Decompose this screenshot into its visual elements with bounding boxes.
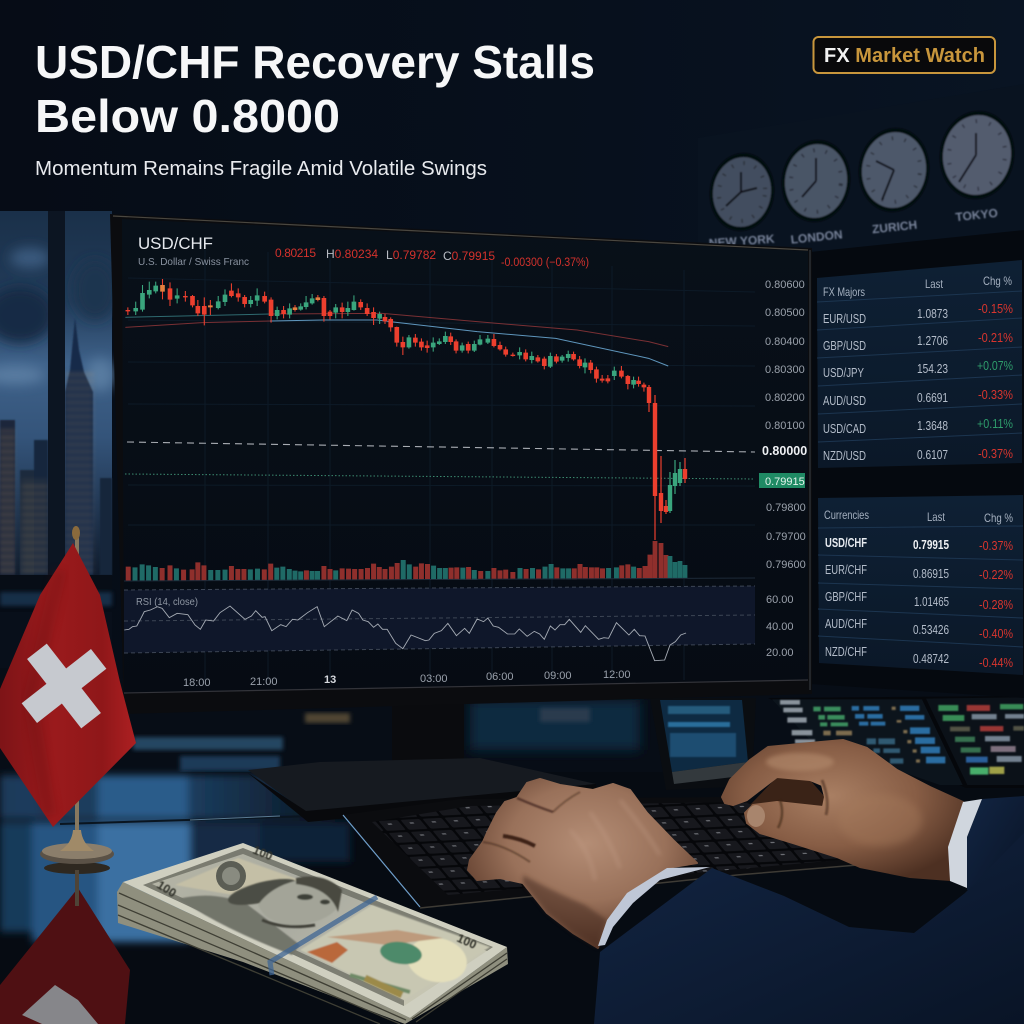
- table: FX Majors: -0.33%: [978, 387, 1013, 402]
- chart header: C0.79915: [443, 249, 495, 263]
- table: Currencies: GBP/CHF: [825, 590, 867, 604]
- right hand on keyboard: [722, 740, 963, 880]
- table: Currencies: -0.40%: [979, 626, 1013, 641]
- price axis: 0.80400: [765, 336, 805, 348]
- table: Currencies: [818, 495, 1023, 675]
- panel: main monitor: [110, 214, 812, 714]
- price axis: 0.80100: [765, 420, 805, 432]
- clock: New York: [705, 149, 779, 235]
- table: FX Majors: 1.0873: [917, 306, 948, 321]
- panel: side quote screens: [810, 230, 1024, 698]
- title: Below 0.8000: [35, 90, 340, 142]
- Swiss flag on stand: [0, 526, 136, 1024]
- price axis: [759, 279, 807, 659]
- right hand shading: [778, 780, 827, 828]
- keypad trading terminals: [768, 696, 1024, 788]
- time axis: [183, 669, 631, 689]
- title: [35, 36, 595, 142]
- title: USD/CHF Recovery Stalls: [35, 36, 595, 88]
- subtitle: Momentum Remains Fragile Amid Volatile Swings: [35, 158, 487, 180]
- chart header: L0.79782: [386, 248, 436, 262]
- monitor stand: [248, 698, 596, 822]
- table: FX Majors: -0.15%: [978, 301, 1013, 316]
- price axis: 0.79915: [765, 476, 805, 488]
- note numerals: 100: [251, 843, 275, 863]
- time axis: 21:00: [250, 676, 278, 688]
- stack sides: [117, 882, 508, 1024]
- time axis: 12:00: [603, 669, 631, 681]
- table: Currencies: Currencies: [824, 508, 869, 522]
- chart header: USD/CHF: [138, 234, 213, 253]
- flag pole and base: [40, 526, 114, 906]
- note design details: [300, 905, 490, 1000]
- left hand veins and highlights: [570, 800, 660, 880]
- clock labels: NEW YORK: [708, 232, 775, 250]
- clock labels: TOKYO: [955, 206, 998, 224]
- price axis: 0.80200: [765, 392, 805, 404]
- price axis: 0.79800: [766, 502, 806, 514]
- clock: Zurich: [853, 124, 935, 216]
- small data terminal: [650, 698, 756, 790]
- table: FX Majors: Chg %: [983, 274, 1012, 288]
- table: Currencies: 0.79915: [913, 538, 949, 552]
- table: Currencies: USD/CHF: [825, 536, 867, 550]
- table: FX Majors: 1.3648: [917, 418, 948, 433]
- top note: [123, 843, 507, 1018]
- table: FX Majors: +0.11%: [977, 416, 1013, 431]
- time axis: 03:00: [420, 673, 448, 685]
- table: Currencies: Chg %: [984, 511, 1013, 525]
- moving averages: [125, 313, 668, 366]
- table: Currencies: -0.37%: [979, 538, 1013, 553]
- table: FX Majors: USD/JPY: [823, 365, 864, 380]
- price axis: 0.80600: [765, 279, 805, 291]
- treasury seal: [216, 861, 246, 891]
- suit jacket and cuffs: [594, 796, 1024, 1024]
- monitor bezel: [110, 214, 812, 714]
- time axis: 06:00: [486, 671, 514, 683]
- time axis: 18:00: [183, 677, 211, 689]
- cream left panel: [175, 858, 300, 900]
- security strap: [270, 897, 377, 975]
- table: FX Majors: 0.6691: [917, 390, 948, 405]
- table: FX Majors: +0.07%: [977, 358, 1013, 373]
- candlesticks: [128, 279, 685, 540]
- time axis: 09:00: [544, 670, 572, 682]
- office window with city skyline: [0, 211, 117, 672]
- table: FX Majors: 1.2706: [917, 333, 948, 348]
- table: Currencies: 1.01465: [914, 595, 949, 609]
- current price line: [125, 474, 755, 479]
- RSI panel: [124, 586, 755, 661]
- table: Currencies: Last: [927, 510, 946, 524]
- left arm sleeve: [594, 833, 1024, 1024]
- glass desk: [0, 772, 1024, 1024]
- table: FX Majors: Last: [925, 277, 944, 291]
- table: FX Majors: -0.21%: [978, 330, 1013, 345]
- table: Currencies: -0.22%: [979, 567, 1013, 582]
- time axis: 13: [324, 674, 336, 686]
- table: Currencies: -0.28%: [979, 597, 1013, 612]
- right shirt cuff: [948, 799, 982, 888]
- badge: FX Market Watch: [814, 37, 995, 73]
- chart header: 0.80215: [275, 246, 316, 260]
- table: FX Majors: -0.37%: [978, 446, 1013, 461]
- clock labels: ZURICH: [871, 218, 918, 236]
- Franklin portrait: [178, 874, 342, 955]
- table: Currencies: 0.53426: [913, 623, 949, 637]
- clock labels: LONDON: [790, 227, 843, 247]
- table: FX Majors: NZD/USD: [823, 448, 866, 463]
- table: Currencies: -0.44%: [979, 655, 1013, 670]
- table: FX Majors: FX Majors: [823, 285, 865, 299]
- flag reflection: [0, 888, 130, 1024]
- keyboard: [343, 797, 880, 908]
- table: Currencies: AUD/CHF: [825, 617, 867, 631]
- clock labels: [708, 206, 998, 250]
- left hand finger shadows: [483, 792, 580, 862]
- table: Currencies: 0.86915: [913, 567, 949, 581]
- price axis: 20.00: [766, 647, 794, 659]
- note numerals: 100: [154, 878, 179, 900]
- RSI panel: RSI (14, close): [136, 596, 198, 608]
- table: FX Majors: 0.6107: [917, 447, 948, 462]
- price axis: 0.79700: [766, 531, 806, 543]
- volume bars: [124, 541, 755, 581]
- table: FX Majors: 154.23: [917, 361, 948, 376]
- left shirt cuff: [598, 867, 710, 946]
- table: Currencies: EUR/CHF: [825, 563, 867, 577]
- chart header: H0.80234: [326, 247, 378, 261]
- flag cloth: [0, 543, 136, 827]
- price axis: 0.80000: [762, 444, 807, 458]
- chart header: [138, 234, 589, 269]
- flag cross: [2, 624, 126, 748]
- right arm sleeve: [967, 796, 1024, 890]
- blurred trading floor behind monitor: [0, 668, 1024, 778]
- left hand on keyboard: [468, 779, 697, 948]
- price axis: 0.79600: [766, 559, 806, 571]
- price axis: 0.80500: [765, 307, 805, 319]
- clock: London: [777, 136, 855, 226]
- price axis: 0.80300: [765, 364, 805, 376]
- RSI line: [124, 606, 686, 661]
- table: FX Majors: USD/CAD: [823, 421, 866, 436]
- chart header: U.S. Dollar / Swiss Franc: [138, 256, 249, 268]
- stack of dollar banknotes: [117, 843, 508, 1024]
- fingers behind: [750, 777, 825, 810]
- level line 0.80000: [127, 442, 755, 452]
- price axis: 40.00: [766, 621, 794, 633]
- note numerals: 100: [455, 931, 479, 952]
- table: FX Majors: EUR/USD: [823, 311, 866, 326]
- thumb nail: [747, 805, 765, 827]
- note print area: [143, 848, 493, 1006]
- table: Currencies: NZD/CHF: [825, 645, 867, 659]
- chart header: -0.00300 (−0.37%): [501, 257, 589, 269]
- panel: world clocks: [698, 84, 1024, 262]
- chart grid: [128, 250, 755, 680]
- table: Currencies: 0.48742: [913, 652, 949, 666]
- table: FX Majors: [817, 260, 1022, 468]
- table: FX Majors: AUD/USD: [823, 393, 866, 408]
- badge: FX Market Watch: FX Market Watch: [824, 45, 985, 67]
- note numerals: [154, 843, 479, 952]
- table: FX Majors: GBP/USD: [823, 338, 866, 353]
- left hand lower shadow: [523, 875, 607, 948]
- clock: Tokyo: [934, 106, 1020, 204]
- price axis: 60.00: [766, 594, 794, 606]
- monitor screen: [122, 219, 808, 693]
